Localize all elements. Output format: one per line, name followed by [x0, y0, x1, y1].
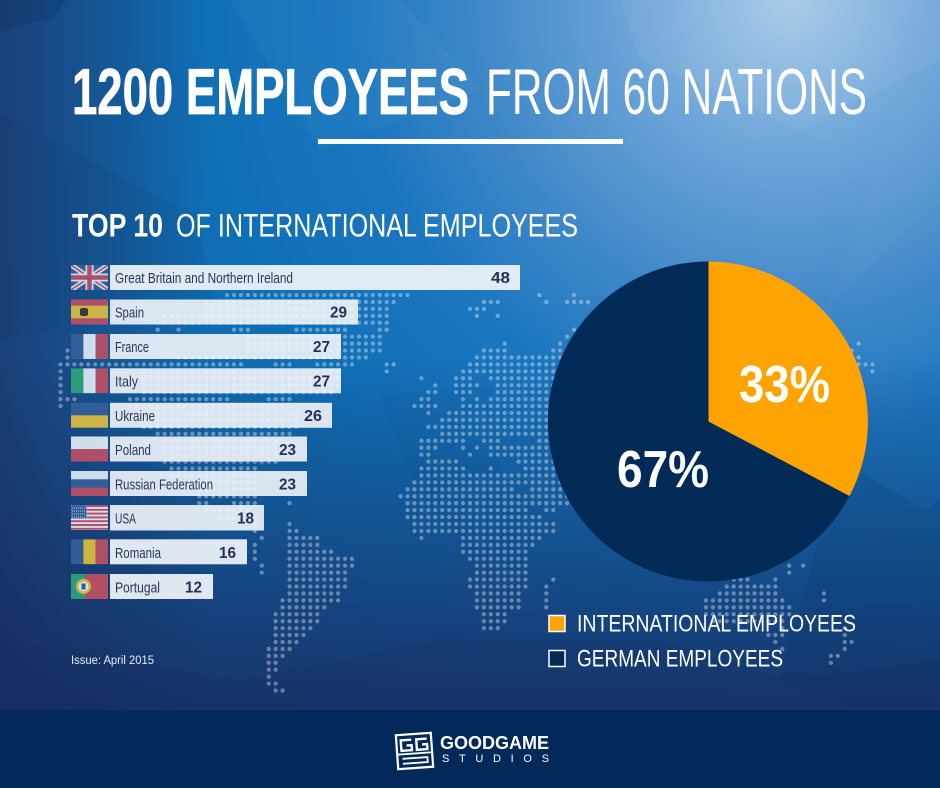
row: Russian Federation: 23 [279, 476, 296, 493]
bar chart: top 10 countries [71, 265, 520, 599]
row: Italy [71, 368, 341, 393]
logo [396, 733, 549, 769]
row: Portugal [71, 574, 213, 599]
row: Great Britain [71, 265, 520, 290]
row: Great Britain: 48 [491, 270, 510, 287]
footer band [0, 710, 940, 788]
legend item: german: GERMAN EMPLOYEES [577, 646, 783, 673]
title underline [318, 139, 623, 144]
row: Spain: Spain [115, 304, 144, 322]
heading: top 10: OF INTERNATIONAL EMPLOYEES [176, 208, 578, 244]
row: USA: 18 [237, 510, 254, 528]
value: 67%: 67% [617, 441, 709, 499]
heading: top 10 [72, 208, 578, 244]
row: Romania: Romania [115, 545, 162, 562]
row: Spain: 29 [330, 304, 347, 322]
row: France [71, 334, 341, 359]
issue note: Issue: April 2015 [71, 655, 154, 667]
row: Romania [71, 539, 247, 564]
row: Portugal: Portugal [115, 580, 160, 596]
row: Romania: 16 [219, 545, 236, 562]
title: 1200 EMPLOYEES [72, 55, 469, 128]
heading: top 10: TOP 10 [72, 208, 163, 244]
row: Great Britain: Great Britain and Northern Ireland [115, 270, 293, 287]
slice: German employees 67% [548, 261, 850, 581]
row: Poland [71, 436, 307, 462]
slice: International employees 33% [708, 262, 868, 496]
logo icon [396, 733, 433, 769]
row: Poland: 23 [279, 442, 296, 459]
row: Ukraine: 26 [304, 408, 322, 425]
world map dots [61, 295, 879, 691]
row: Spain [71, 300, 358, 324]
legend [549, 611, 856, 673]
pie chart [548, 261, 868, 581]
row: Ukraine [71, 403, 332, 428]
row: France: 27 [313, 339, 330, 356]
row: Poland: Poland [115, 442, 151, 459]
row: Italy: Italy [115, 373, 138, 390]
row: USA: USA [115, 510, 136, 528]
value: 33%: 33% [739, 356, 830, 414]
row: Italy: 27 [313, 373, 330, 390]
row: France: France [115, 339, 149, 356]
row: Ukraine: Ukraine [115, 408, 155, 425]
row: Russian Federation [71, 471, 307, 496]
row: Portugal: 12 [185, 580, 202, 596]
row: USA [71, 505, 264, 530]
logo wordmark: GOODGAME [440, 733, 549, 753]
row: Russian Federation: Russian Federation [115, 476, 213, 493]
logo subtitle: STUDIOS [442, 753, 549, 765]
legend item: international: INTERNATIONAL EMPLOYEES [577, 611, 856, 638]
